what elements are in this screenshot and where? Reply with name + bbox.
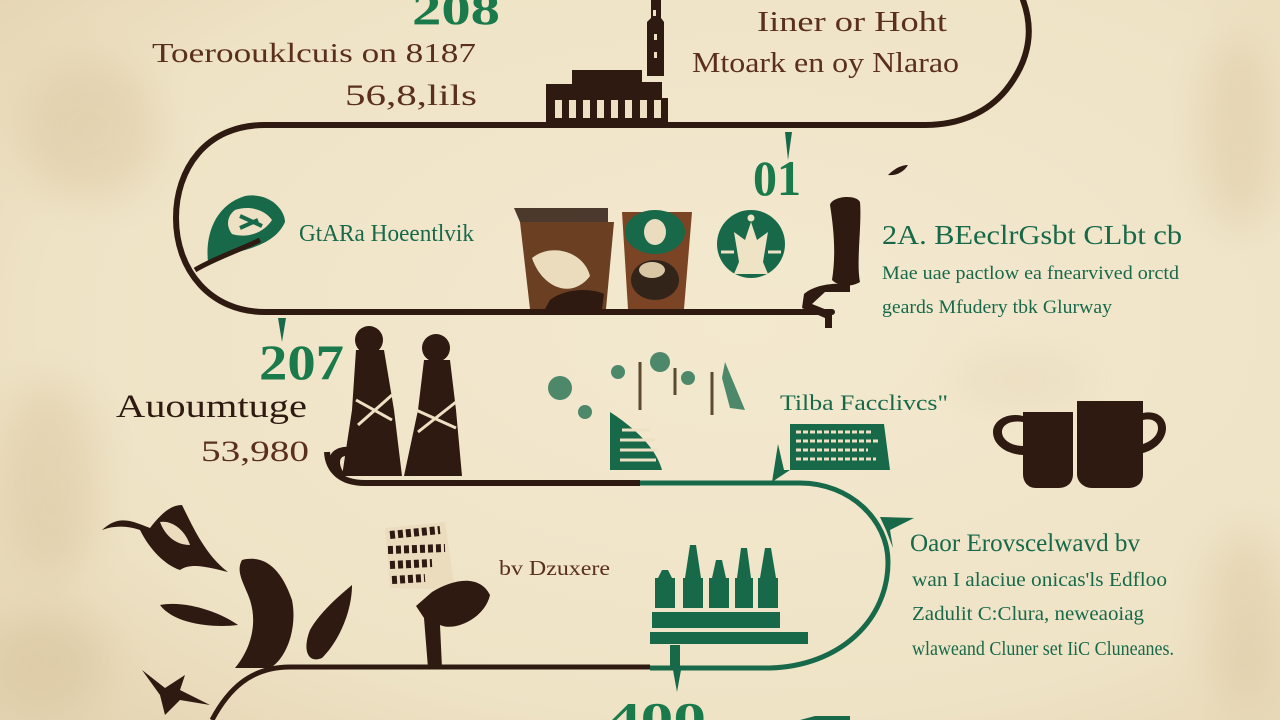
icon: green and brown leaf emblem bbox=[195, 195, 285, 270]
ink mark bbox=[888, 165, 908, 175]
icon: tower and arcade building bbox=[546, 0, 668, 122]
milestone lower: right text: wan I alaciue onicas'ls Edfloo bbox=[912, 569, 1167, 591]
year marker 01: 01 bbox=[753, 150, 801, 206]
illustration: birds and leaves silhouettes bbox=[102, 505, 352, 715]
icon: two coffee cups illustration bbox=[514, 208, 692, 309]
timeline path: green curve bbox=[640, 483, 888, 668]
milestone lower: right text bbox=[910, 530, 1174, 660]
timeline path: lower brown end bbox=[212, 667, 650, 720]
timeline path: lower brown start bbox=[327, 452, 640, 483]
milestone 2007: left text: Auoumtuge bbox=[116, 389, 307, 425]
milestone 01: right text: Mae uae pactlow ea fnearvived orctd bbox=[882, 263, 1180, 284]
illustration: green trees and document bbox=[548, 352, 745, 470]
milestone 2007: left text: 53,980 bbox=[201, 435, 309, 468]
icon: standing figure with tap bbox=[802, 197, 860, 328]
milestone lower: right text: wlaweand Cluner set IiC Cluneanes. bbox=[912, 638, 1174, 660]
icon: two dark coffee mugs bbox=[993, 401, 1166, 488]
timeline path: upper brown ribbon bbox=[176, 0, 1029, 312]
milestone top: right text bbox=[692, 6, 959, 79]
green sign with pointer bbox=[772, 424, 890, 482]
milestone 01: right text: geards Mfudery tbk Glurway bbox=[882, 297, 1113, 318]
milestone 01: right text: 2A. BEeclrGsbt CLbt cb bbox=[882, 220, 1182, 250]
milestone lower: right text: Oaor Erovscelwavd bv bbox=[910, 530, 1140, 557]
icon: two silhouetted figures bbox=[329, 326, 462, 476]
milestone top: left text: Toeroouklcuis on 8187 bbox=[152, 38, 476, 68]
milestone 2007: left text bbox=[116, 389, 309, 468]
icon: flourish arrow on green curve bbox=[880, 517, 914, 548]
milestone 01: left label: GtARa Hoeentlvik bbox=[299, 221, 474, 247]
bottom green mark bbox=[800, 716, 850, 720]
illustration: tree with carved label bbox=[385, 522, 490, 668]
milestone top: right text: Iiner or Hoht bbox=[757, 6, 947, 38]
year marker 2007: 207 bbox=[259, 334, 344, 390]
milestone top: right text: Mtoark en oy Nlarao bbox=[692, 47, 959, 79]
year marker 2007 bbox=[259, 318, 344, 390]
milestone lower: right text: Zadulit C:Clura, neweaoiag bbox=[912, 603, 1144, 625]
year marker bottom bbox=[608, 670, 706, 720]
milestone 01: right text bbox=[882, 220, 1182, 318]
milestone 2007: right label: Tilba Facclivcs" bbox=[780, 390, 948, 415]
icon: green row of bottles on shelf bbox=[650, 545, 808, 668]
milestone top: left text: 56,8,lils bbox=[345, 79, 477, 112]
milestone top: left text bbox=[152, 38, 477, 112]
icon: round green siren logo bbox=[717, 210, 785, 278]
milestone lower: label: bv Dzuxere bbox=[499, 556, 610, 580]
